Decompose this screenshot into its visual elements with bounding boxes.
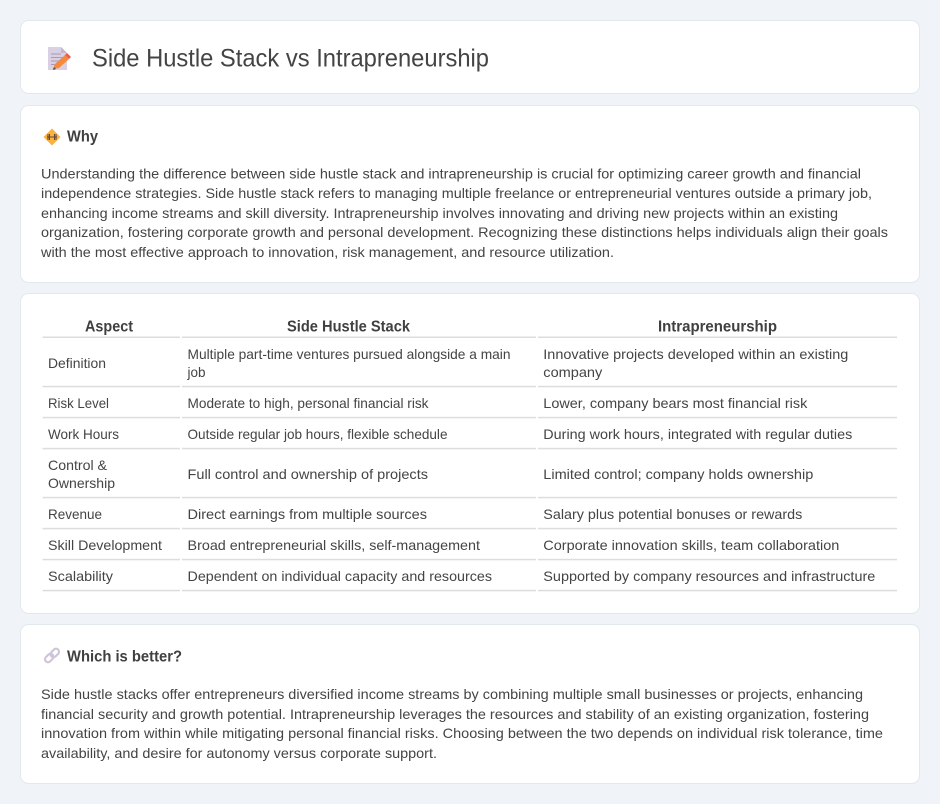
row: definition: Multiple part-time ventures pursued alongside a main (188, 346, 510, 362)
row: risk level: Lower, company bears most financial risk (543, 395, 808, 411)
heading: which is better: Which is better? (67, 648, 182, 666)
text block: why: organization, fostering corporate growth and personal development. Recognizing these distinctions helps individuals align their goals (41, 224, 888, 240)
row: scalability: Dependent on individual capacity and resources (188, 568, 492, 584)
text block: which is better: innovation from within while mitigating personal financial risks. Choosing between the two depends on individual risk tolerance, time (41, 725, 883, 741)
row: control and ownership: Limited control; company holds ownership (543, 466, 814, 482)
row: definition (48, 346, 848, 380)
row: skill development: Corporate innovation skills, team collaboration (543, 537, 839, 553)
row: revenue: Direct earnings from multiple sources (188, 506, 427, 522)
row: skill development (48, 537, 839, 553)
row: skill development: Skill Development (48, 537, 162, 553)
row: revenue (48, 506, 802, 522)
text block: why: with the most effective approach to innovation, risk management, and resource utilization. (40, 244, 614, 260)
row: risk level: Moderate to high, personal financial risk (188, 395, 429, 411)
text block: why (40, 166, 888, 260)
panel: comparison table (20, 294, 920, 614)
panel: why (20, 106, 920, 282)
row: definition: Innovative projects developed within an existing (543, 346, 848, 362)
row: control and ownership: Control & (48, 457, 108, 473)
row: work hours: During work hours, integrated with regular duties (543, 426, 852, 442)
table header (85, 318, 777, 336)
icon: warning diamond (44, 128, 60, 146)
text block: which is better (41, 686, 883, 761)
row: definition: Definition (48, 355, 106, 371)
row: scalability: Scalability (48, 568, 113, 584)
icon: memo with pencil (48, 47, 71, 70)
title: Side Hustle Stack vs Intrapreneurship (92, 44, 489, 72)
text block: why: Understanding the difference between side hustle stack and intrapreneurship is crucial for optimizing career growth and financial (41, 166, 861, 182)
row: definition: job (187, 364, 206, 380)
row: control and ownership: Ownership (48, 475, 115, 491)
row: work hours: Work Hours (48, 426, 119, 442)
table header: Intrapreneurship (658, 318, 777, 336)
heading: why: Why (67, 128, 98, 146)
row: work hours (48, 426, 852, 442)
text block: why: enhancing income streams and skill diversity. Intrapreneurship involves innovating and driving new projects within an existing (41, 205, 838, 221)
panel: header (20, 20, 920, 94)
text block: which is better: availability, and desire for autonomy versus corporate support. (41, 745, 437, 761)
row: revenue: Revenue (48, 506, 102, 522)
row: risk level: Risk Level (48, 395, 109, 411)
panel: which is better (20, 624, 920, 784)
row: definition: company (543, 364, 602, 380)
row: revenue: Salary plus potential bonuses or rewards (543, 506, 802, 522)
row: scalability (48, 568, 876, 584)
text block: why: independence strategies. Side hustle stack refers to managing multiple freelance or entrepreneurial ventures outside a primary job, (41, 185, 872, 201)
row: control and ownership: Full control and ownership of projects (188, 466, 428, 482)
row: control and ownership (48, 457, 814, 491)
row: scalability: Supported by company resources and infrastructure (543, 568, 876, 584)
table header: Side Hustle Stack (287, 318, 410, 336)
row: work hours: Outside regular job hours, flexible schedule (188, 426, 448, 442)
text block: which is better: Side hustle stacks offer entrepreneurs diversified income streams by combining multiple small businesses or projects, enhancing (41, 686, 863, 702)
row: skill development: Broad entrepreneurial skills, self-management (188, 537, 480, 553)
row: risk level (48, 395, 808, 411)
icon: chain link (44, 648, 60, 663)
text block: which is better: financial security and growth potential. Intrapreneurship leverages the resources and stability of an existing organization, fostering (41, 706, 869, 722)
table header: Aspect (85, 318, 134, 336)
